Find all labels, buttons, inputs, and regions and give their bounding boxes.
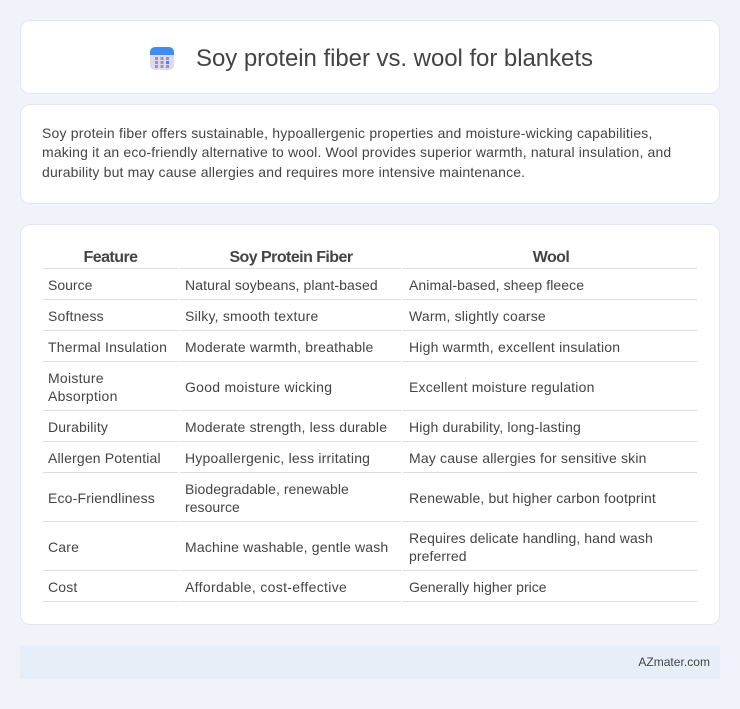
comparison table: Source <box>48 277 92 293</box>
row: durability <box>48 419 581 435</box>
comparison table: Wool <box>533 249 569 266</box>
row: moisture absorption <box>48 370 595 404</box>
row: allergen potential <box>48 450 647 466</box>
comparison table: High durability, long-lasting <box>409 419 581 435</box>
comparison table: Animal-based, sheep fleece <box>409 277 584 293</box>
comparison table: Absorption <box>48 388 118 404</box>
comparison table: Moderate strength, less durable <box>185 419 387 435</box>
comparison table: Natural soybeans, plant-based <box>185 277 378 293</box>
comparison table: Care <box>48 539 79 555</box>
footer brand: AZmater.com <box>638 655 710 669</box>
comparison table: Thermal Insulation <box>48 339 167 355</box>
comparison table: Softness <box>48 308 104 324</box>
column headers <box>84 249 569 266</box>
summary text: making it an eco-friendly alternative to wool. Wool provides superior warmth, natural insulation, and <box>42 144 671 160</box>
row: eco-friendliness <box>48 481 656 515</box>
comparison table: resource <box>185 499 240 515</box>
comparison table: Cost <box>48 579 77 595</box>
row: care <box>48 530 653 564</box>
comparison table: Requires delicate handling, hand wash <box>409 530 653 546</box>
comparison table: preferred <box>409 548 467 564</box>
comparison table: Allergen Potential <box>48 450 161 466</box>
row: softness <box>48 308 546 324</box>
comparison table: Good moisture wicking <box>185 379 332 395</box>
comparison table: High warmth, excellent insulation <box>409 339 620 355</box>
comparison table: Hypoallergenic, less irritating <box>185 450 370 466</box>
comparison table: Affordable, cost-effective <box>185 579 347 595</box>
comparison table: Eco-Friendliness <box>48 490 155 506</box>
summary panel <box>20 104 720 204</box>
comparison table: Machine washable, gentle wash <box>185 539 388 555</box>
comparison table: Warm, slightly coarse <box>409 308 546 324</box>
comparison table: Moderate warmth, breathable <box>185 339 374 355</box>
comparison table: Feature <box>84 249 137 266</box>
comparison table: Soy Protein Fiber <box>229 249 353 266</box>
row: cost <box>48 579 547 595</box>
row: source <box>48 277 584 293</box>
summary text: Soy protein fiber offers sustainable, hypoallergenic properties and moisture-wicking capabilities, <box>42 125 653 141</box>
summary text: durability but may cause allergies and requires more intensive maintenance. <box>42 164 525 180</box>
comparison table: Excellent moisture regulation <box>409 379 595 395</box>
comparison table: Renewable, but higher carbon footprint <box>409 490 656 506</box>
comparison table: May cause allergies for sensitive skin <box>409 450 647 466</box>
comparison table: Silky, smooth texture <box>185 308 319 324</box>
comparison table panel <box>20 224 720 625</box>
summary text <box>42 125 671 180</box>
title panel <box>20 20 720 94</box>
footer bar <box>20 645 720 679</box>
row: thermal insulation <box>48 339 620 355</box>
comparison table: Generally higher price <box>409 579 547 595</box>
comparison table: Moisture <box>48 370 104 386</box>
comparison table: Durability <box>48 419 108 435</box>
title: Soy protein fiber vs. wool for blankets <box>196 45 593 72</box>
icon: calendar <box>150 47 174 70</box>
comparison table: Biodegradable, renewable <box>185 481 349 497</box>
